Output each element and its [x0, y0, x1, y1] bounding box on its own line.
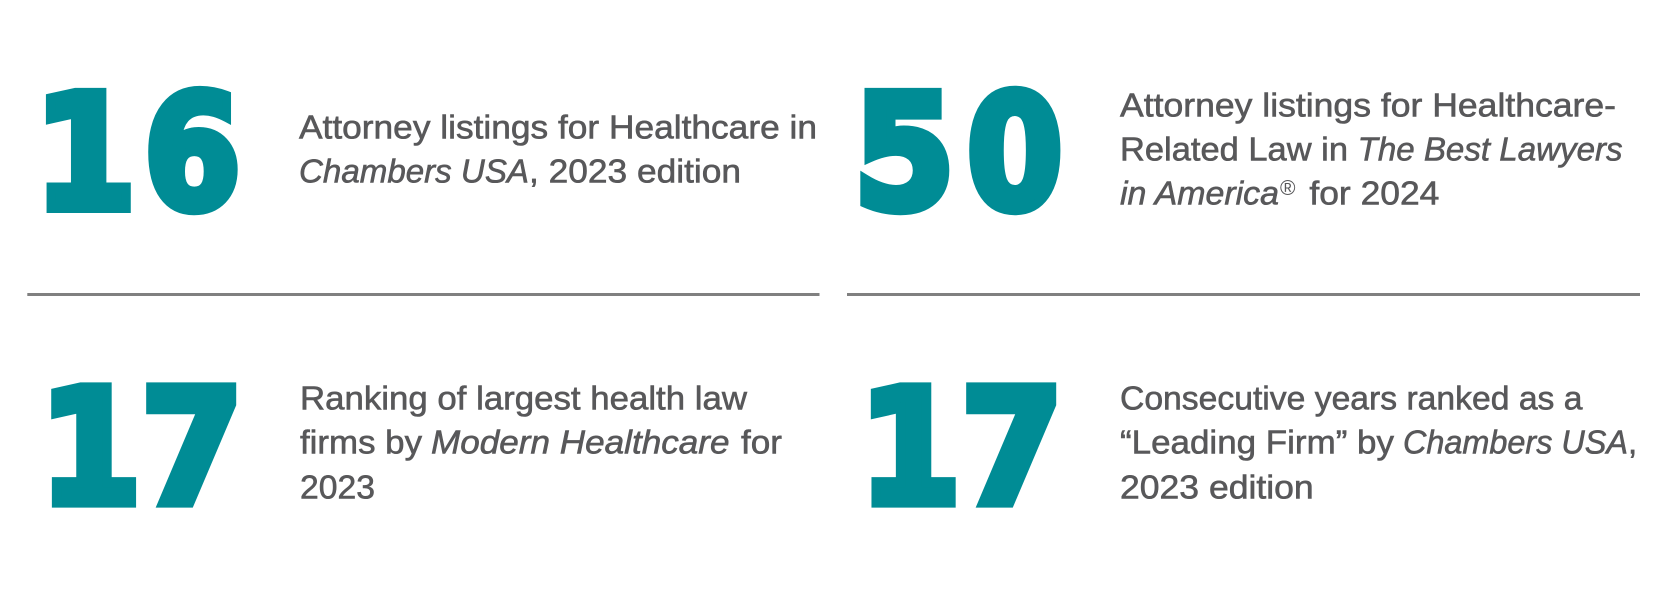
number: 17: 1: [39, 356, 142, 540]
panel: 17 Modern Healthcare ranking: [39, 356, 782, 540]
divider: top left: [27, 293, 820, 296]
text: attorney listings for healthcare-related law: for 2024: [1309, 174, 1439, 212]
number: 16: 1: [34, 61, 136, 245]
number: 50: 0: [967, 62, 1063, 245]
text: attorney listings for healthcare: Attorney listings for Healthcare in: [299, 108, 817, 146]
text: attorney listings for healthcare-related law: ®: [1280, 177, 1296, 200]
text: consecutive years ranked: Chambers USA: [1403, 424, 1628, 460]
number: 17: 1: [859, 356, 961, 540]
text: consecutive years ranked: Consecutive years ranked as a: [1120, 380, 1583, 416]
number: 17: [39, 356, 243, 540]
number: 17: [859, 356, 1063, 540]
text: ranking of largest health law firms: [300, 380, 782, 506]
number: 16: [34, 61, 241, 246]
text: attorney listings for healthcare-related law: in America: [1120, 174, 1279, 212]
number: 16: 6: [144, 63, 241, 246]
text: consecutive years ranked: “Leading Firm” by: [1120, 424, 1395, 460]
text: attorney listings for healthcare: , 2023 edition: [529, 152, 741, 190]
number: 50: 5: [854, 61, 955, 245]
text: attorney listings for healthcare-related law: The Best Lawyers: [1358, 130, 1623, 168]
panel: 50 Best Lawyers listings: [854, 61, 1623, 245]
text: ranking of largest health law firms: Modern Healthcare: [431, 424, 730, 460]
text: attorney listings for healthcare: Chambers USA: [299, 152, 529, 190]
text: ranking of largest health law firms: for: [741, 424, 782, 460]
text: ranking of largest health law firms: firms by: [300, 424, 423, 460]
text: consecutive years ranked: [1120, 380, 1637, 506]
divider: top right: [847, 293, 1640, 296]
text: attorney listings for healthcare-related law: [1120, 86, 1623, 212]
panel: 16 Chambers listings: [34, 61, 817, 246]
text: ranking of largest health law firms: Ranking of largest health law: [300, 380, 747, 416]
text: consecutive years ranked: ,: [1628, 424, 1637, 460]
text: attorney listings for healthcare: [299, 108, 817, 190]
text: ranking of largest health law firms: 2023: [300, 468, 375, 506]
text: consecutive years ranked: 2023 edition: [1120, 468, 1314, 506]
number: 17: 7: [961, 356, 1063, 540]
number: 50: [854, 61, 1063, 245]
panel: 17 consecutive years Leading Firm: [859, 356, 1637, 540]
text: attorney listings for healthcare-related law: Attorney listings for Healthcare-: [1120, 86, 1616, 124]
number: 17: 7: [141, 356, 243, 540]
text: attorney listings for healthcare-related law: Related Law in: [1120, 130, 1348, 168]
